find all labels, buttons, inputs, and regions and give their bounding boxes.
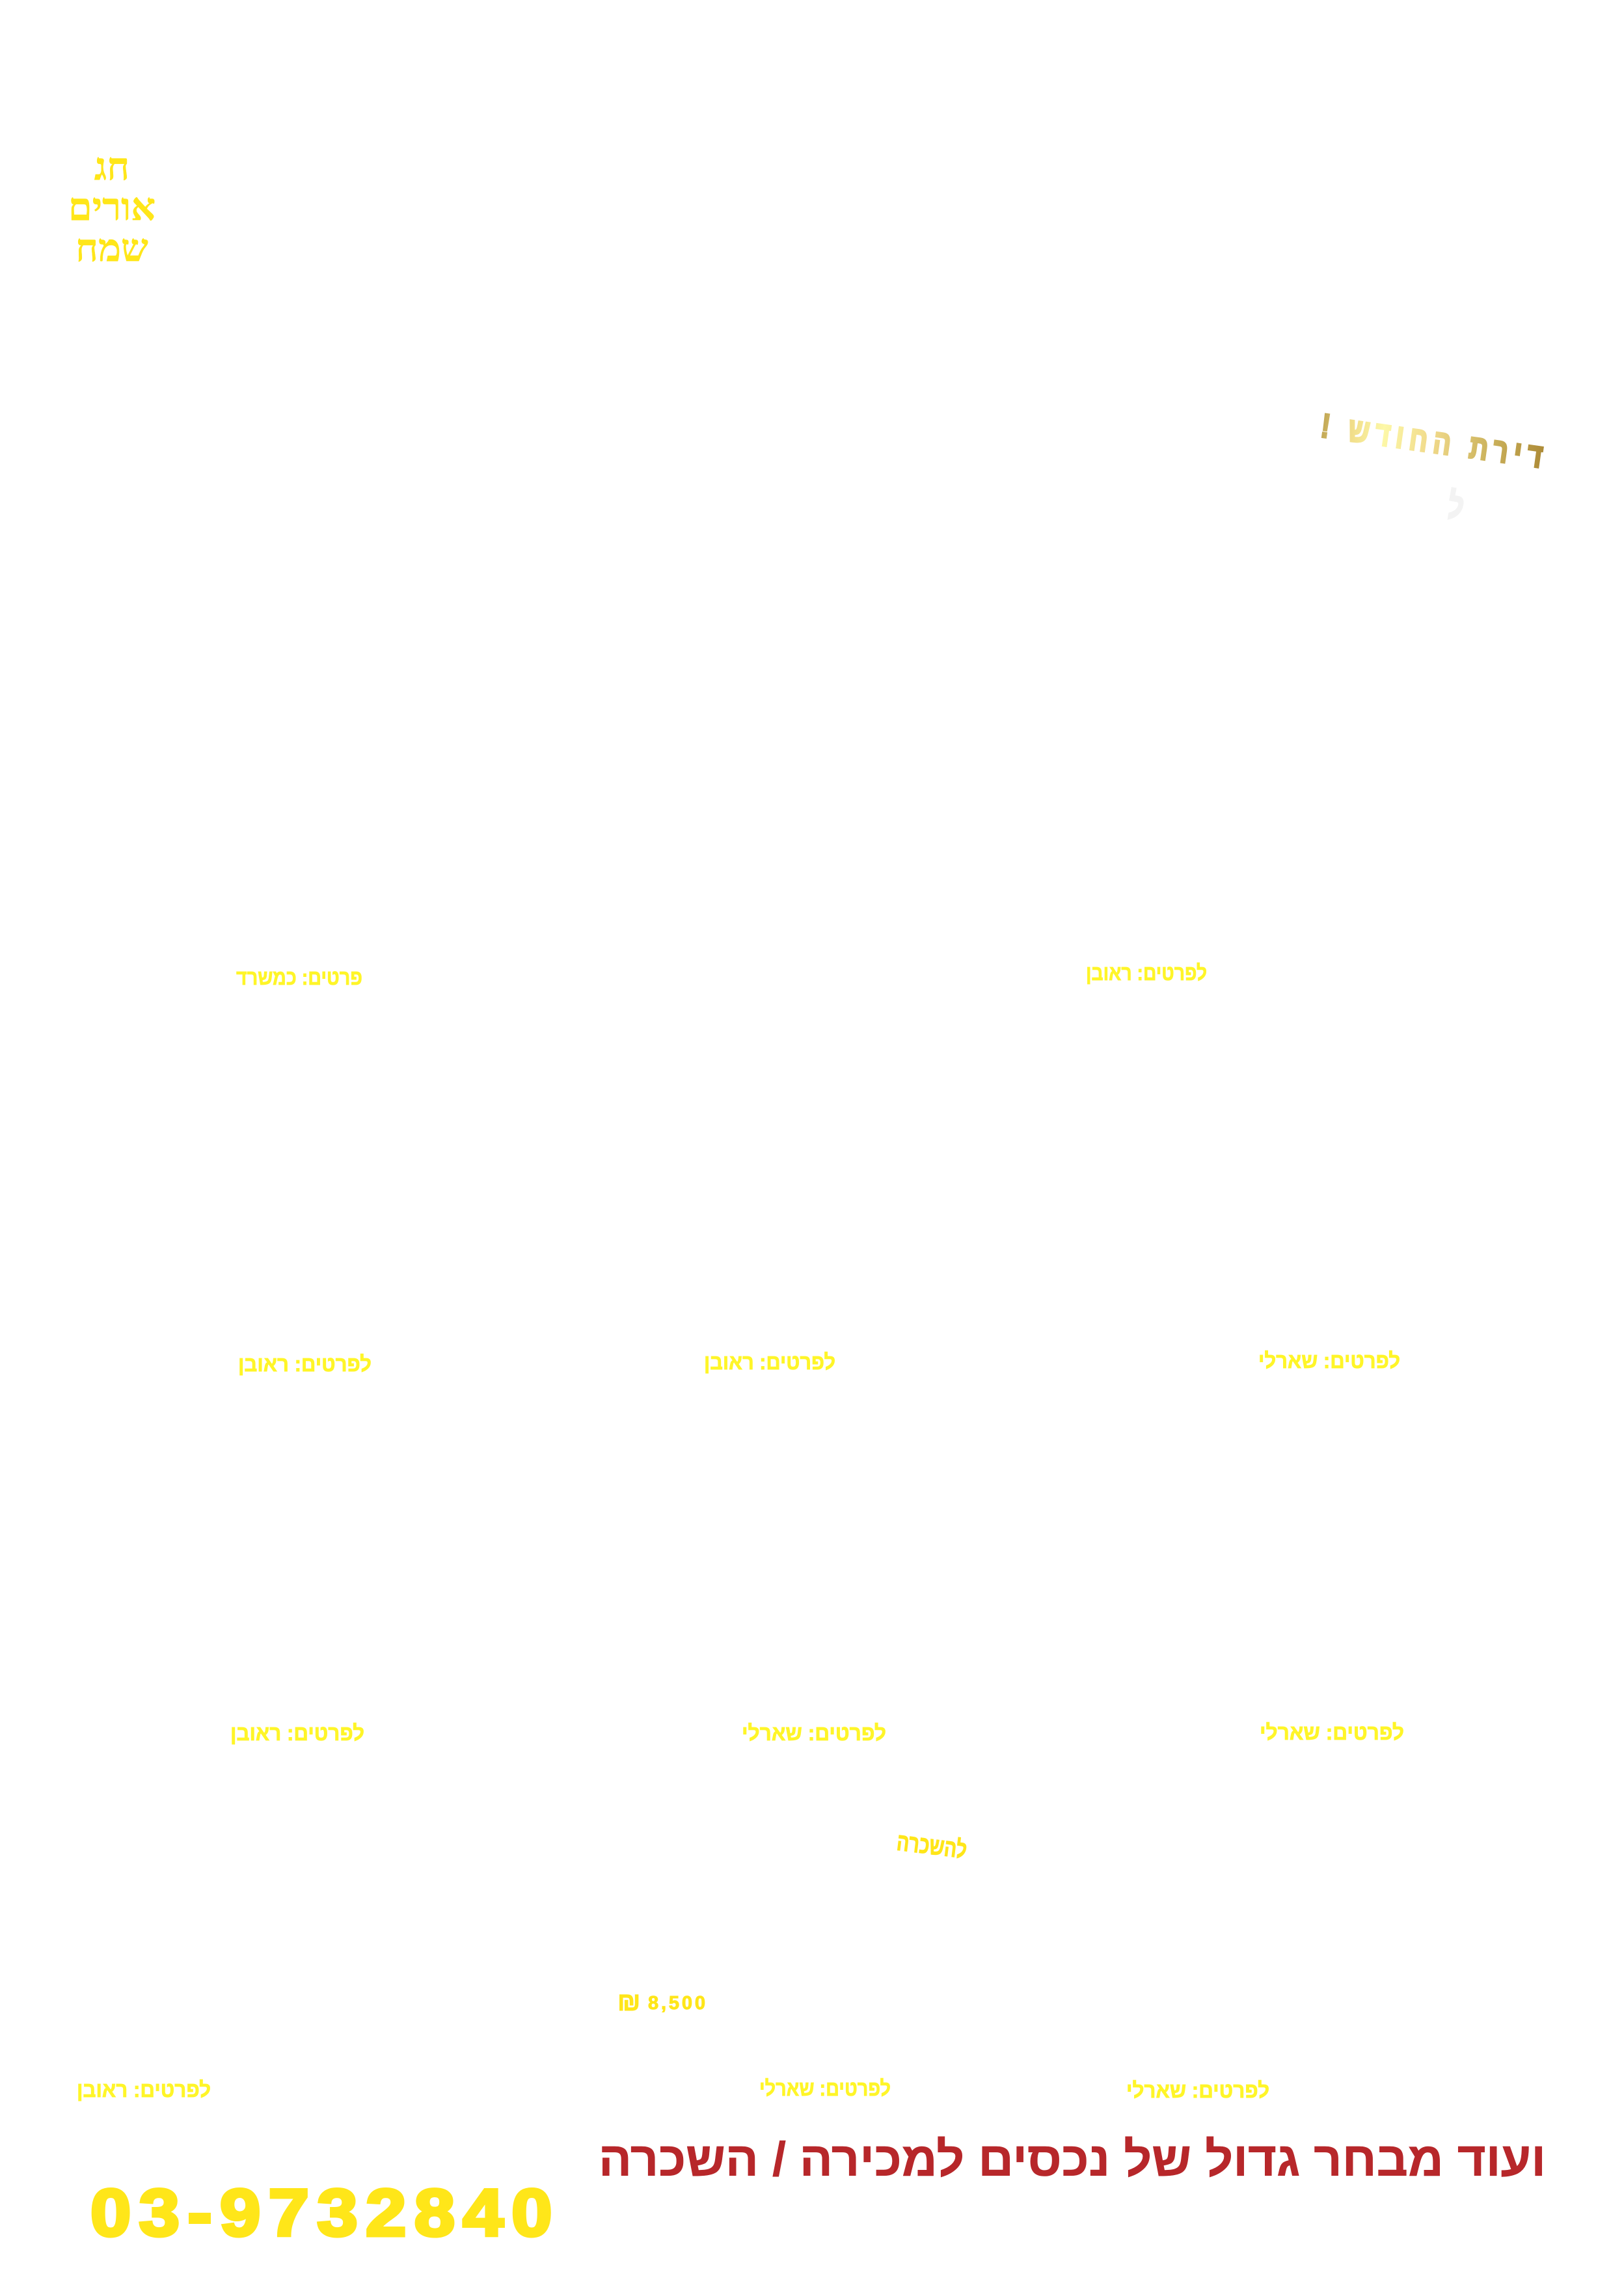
phone number: 03-9732840 [90, 2176, 552, 2250]
price [617, 1988, 705, 2016]
price: ₪ [617, 1988, 640, 2016]
heading: apartment of the month: דירת החודש ! [1319, 407, 1545, 475]
label: details row 2 right: לפרטים: שארלי [1258, 1349, 1400, 1373]
faint letter: ל [1444, 484, 1467, 528]
footer headline: ועוד מבחר גדול של נכסים למכירה / השכרה [599, 2132, 1546, 2186]
label: details row 2 middle: לפרטים: ראובן [704, 1350, 835, 1374]
badge: for rent: להשכרה [895, 1829, 968, 1864]
label: details row 3 right: לפרטים: שארלי [1260, 1720, 1404, 1744]
label: details row 4 left: לפרטים: ראובן [77, 2077, 211, 2102]
price: 8,500 [648, 1993, 705, 2014]
greeting: happy Hanukkah: חג [94, 145, 129, 188]
label: details row 3 left: לפרטים: ראובן [230, 1721, 364, 1745]
label: details row 1 left: פרטים: כמשרד [236, 965, 362, 989]
label: details row 2 left: לפרטים: ראובן [238, 1352, 372, 1376]
greeting: happy Hanukkah: שמח [75, 226, 148, 269]
label: details row 1 right: לפרטים: ראובן [1086, 961, 1207, 985]
label: details row 3 middle: לפרטים: שארלי [742, 1721, 886, 1745]
greeting: happy Hanukkah [68, 145, 156, 269]
label: details row 4 right: לפרטים: שארלי [1126, 2078, 1269, 2102]
greeting: happy Hanukkah: אורים [68, 185, 156, 228]
label: details row 4 middle: לפרטים: שארלי [759, 2076, 891, 2100]
